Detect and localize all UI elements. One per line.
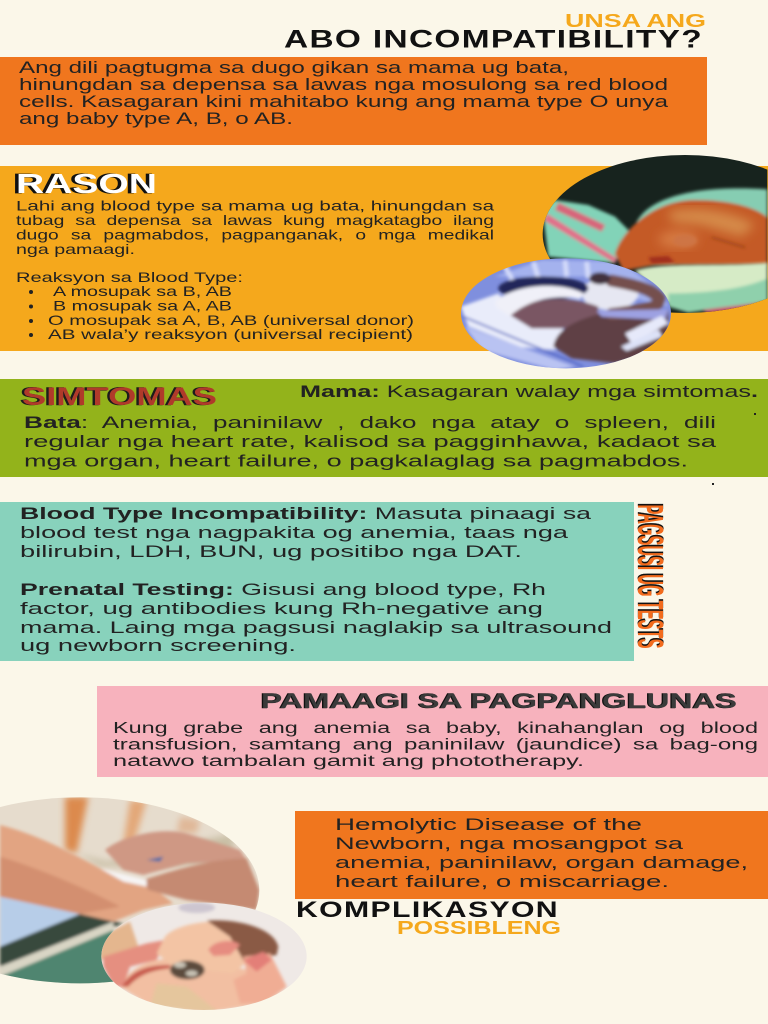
panel: rason [0, 166, 768, 351]
panel: pagsusi ug tests [0, 502, 634, 661]
text: mama symptoms: Mama: Kasagaran walay mga simtomas . [300, 383, 758, 401]
panel: komplikasyon text: Hemolytic Disease of the [335, 815, 642, 834]
text: prenatal testing [20, 580, 612, 655]
heading: pamaagi sa pagpanglunas: PAMAAGI SA PAGPANGLUNAS [261, 690, 737, 713]
text: blood type incompatibility [20, 504, 592, 561]
list: blood type reactions: O mosupak sa A, B, AB (universal donor) [48, 312, 414, 328]
panel: definition: ang baby type A, B, o AB. [19, 110, 293, 128]
title: UNSA ANG [565, 11, 706, 31]
photo: newborn with stethoscope [100, 900, 310, 1013]
text: bata symptoms: regular nga heart rate, kalisod sa pagginhawa, kadaot sa [24, 432, 717, 451]
panel: pamaagi sa pagpanglunas [97, 686, 768, 777]
text: prenatal testing: mama. Laing mga pagsusi naglakip sa ultrasound [20, 618, 612, 637]
stray dot [754, 413, 756, 415]
heading: pamaagi sa pagpanglunas [260, 690, 737, 713]
heading: simtomas: SIMTOMAS [22, 383, 217, 411]
text: bata symptoms [24, 413, 717, 470]
panel: definition: cells. Kasagaran kini mahitabo kung ang mama type O unya [19, 93, 669, 111]
panel: komplikasyon text: anemia, paninilaw, organ damage, [335, 853, 748, 872]
photo: jaundiced newborn [538, 150, 767, 317]
panel: komplikasyon text: Newborn, nga mosangpot sa [335, 834, 684, 853]
panel: definition: hinungdan sa depensa sa lawas nga mosulong sa red blood [19, 76, 668, 94]
text: prenatal testing: ug newborn screening. [20, 636, 296, 655]
title: ABO INCOMPATIBILITY? [284, 26, 703, 54]
text: rason explanation: Lahi ang blood type sa mama ug bata, hinungdan sa [16, 198, 494, 214]
text: rason explanation: tubag sa depensa sa lawas kung magkatagbo ilang [16, 212, 494, 228]
text: prenatal testing: factor, ug antibodies kung Rh-negative ang [20, 599, 543, 618]
heading: simtomas [20, 383, 217, 411]
text: bata symptoms: Bata : Anemia, paninilaw , dako nga atay o spleen, dili [24, 413, 716, 432]
text: treatment: transfusion, samtang ang paninilaw (jaundice) sa bag-ong [113, 736, 758, 754]
text: rason explanation: dugo sa pagmabdos, pagpanganak, o mga medikal [16, 226, 494, 242]
panel: definition [0, 57, 707, 145]
text: blood type incompatibility: blood test nga nagpakita og anemia, taas nga [20, 523, 569, 542]
panel: definition: Ang dili pagtugma sa dugo gikan sa mama ug bata, [19, 59, 569, 77]
text: PAGSUSI UG TESTS [630, 503, 671, 647]
list: blood type reactions: AB wala’y reaksyon (universal recipient) [48, 326, 413, 342]
heading: pamaagi sa pagpanglunas: PAMAAGI SA PAGPANGLUNAS [260, 690, 736, 713]
heading: rason: RASON [16, 168, 157, 199]
text: blood type incompatibility: Blood Type Incompatibility: Masuta pinaagi sa [20, 504, 592, 523]
text: treatment: Kung grabe ang anemia sa baby, kinahanglan og blood [113, 720, 758, 737]
photo: hands on arm [0, 790, 267, 990]
heading: possibleng: POSSIBLENG [397, 918, 561, 938]
panel: komplikasyon text [295, 811, 768, 899]
list: blood type reactions: B mosupak sa A, AB [53, 298, 232, 314]
text: treatment: natawo tambalan gamit ang phototherapy. [113, 753, 584, 770]
panel: komplikasyon text: heart failure, o miscarriage. [335, 872, 669, 891]
heading: simtomas: SIMTOMAS [20, 383, 215, 411]
photo: baby under phototherapy [458, 257, 673, 370]
list: blood type reactions [16, 269, 414, 342]
heading: komplikasyon: KOMPLIKASYON [296, 897, 559, 922]
panel: simtomas [0, 379, 768, 477]
title [284, 11, 706, 54]
stray dot [712, 483, 714, 485]
text: bata symptoms: mga organ, heart failure, o pagkalaglag sa pagmabdos. [24, 452, 688, 470]
text: rason explanation [16, 198, 494, 257]
heading: rason: RASON [13, 168, 154, 199]
text: blood type incompatibility: bilirubin, LDH, BUN, ug positibo nga DAT. [20, 542, 522, 561]
text: PAGSUSI UG TESTS [630, 504, 671, 648]
text: prenatal testing: Prenatal Testing: Gisusi ang blood type, Rh [20, 580, 546, 599]
list: blood type reactions: Reaksyon sa Blood Type: [16, 269, 243, 285]
text: rason explanation: nga pamaagi. [16, 241, 135, 257]
heading: pagsusi ug tests [630, 503, 671, 648]
text: treatment [113, 720, 758, 770]
list: blood type reactions: A mosupak sa B, AB [53, 283, 232, 299]
